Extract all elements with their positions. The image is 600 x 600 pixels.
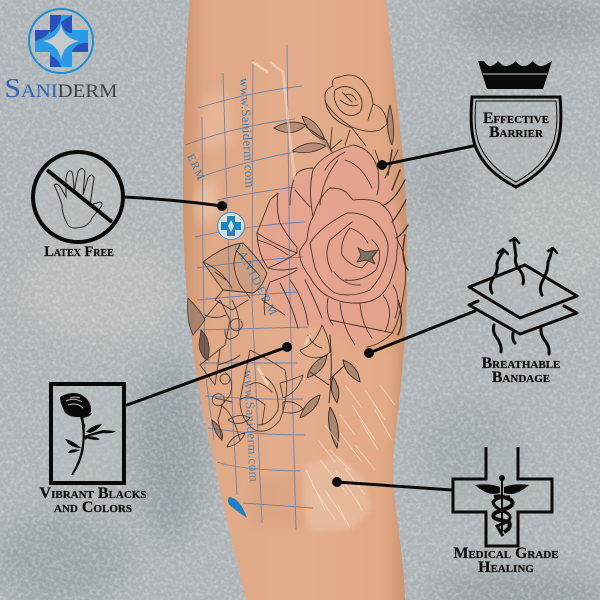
label: Vibrant Blacks and Colors bbox=[40, 485, 146, 516]
top flower bbox=[325, 75, 387, 150]
icon: crown bbox=[478, 61, 552, 89]
icon: rose frame bbox=[51, 384, 124, 483]
rose bbox=[60, 393, 116, 475]
callout lines bbox=[123, 146, 475, 490]
film logo mark bbox=[218, 212, 244, 240]
label: Vibrant Blacks and Colors: and Colors bbox=[54, 499, 132, 516]
icon: no latex hand bbox=[33, 152, 123, 242]
caduceus bbox=[475, 475, 529, 536]
right edge foliage bbox=[384, 150, 408, 335]
film printed text: SANIDERM bbox=[231, 240, 280, 318]
label: Medical Grade Healing: Healing bbox=[478, 559, 534, 576]
main peony bbox=[257, 145, 406, 358]
icon: breathable layers bbox=[469, 238, 577, 354]
film corner logo bbox=[228, 497, 247, 518]
film printed text bbox=[184, 77, 280, 482]
label: Latex Free: Latex Free bbox=[44, 244, 114, 260]
film printed text: ERM bbox=[184, 152, 207, 182]
top leaves bbox=[274, 105, 398, 178]
icon: medical cross with caduceus bbox=[453, 447, 552, 546]
label: Medical Grade Healing: Medical Grade bbox=[453, 545, 559, 562]
lower left blossoms bbox=[188, 298, 303, 447]
logo: Saniderm: Saniderm bbox=[4, 73, 118, 103]
tattoo: peonies and leaves bbox=[188, 75, 408, 448]
film printed text: www.Saniderm.com bbox=[237, 77, 258, 188]
film printed text: www.Saniderm.com bbox=[241, 369, 262, 482]
logo: Saniderm bbox=[4, 9, 118, 103]
logo icon bbox=[29, 9, 93, 73]
label: Medical Grade Healing bbox=[453, 545, 559, 576]
icon: shield with label: Effective bbox=[483, 110, 549, 127]
left tulip bbox=[203, 243, 267, 318]
blue measuring grid bbox=[185, 45, 313, 530]
label: Breathable Bandage: Bandage bbox=[492, 369, 550, 386]
lower stem with leaves bbox=[300, 335, 360, 448]
label: Breathable Bandage: Breathable bbox=[482, 355, 560, 372]
label: Vibrant Blacks and Colors: Vibrant Blacks bbox=[40, 485, 146, 502]
icon: shield with label: Barrier bbox=[489, 124, 544, 141]
tattoo fill: pink peony bbox=[254, 145, 406, 347]
icon: shield with label bbox=[471, 97, 561, 187]
film wrinkles bbox=[252, 62, 395, 528]
forearm bbox=[183, 0, 407, 600]
label: Breathable Bandage bbox=[482, 355, 560, 386]
wrinkled film highlight bbox=[302, 455, 372, 531]
